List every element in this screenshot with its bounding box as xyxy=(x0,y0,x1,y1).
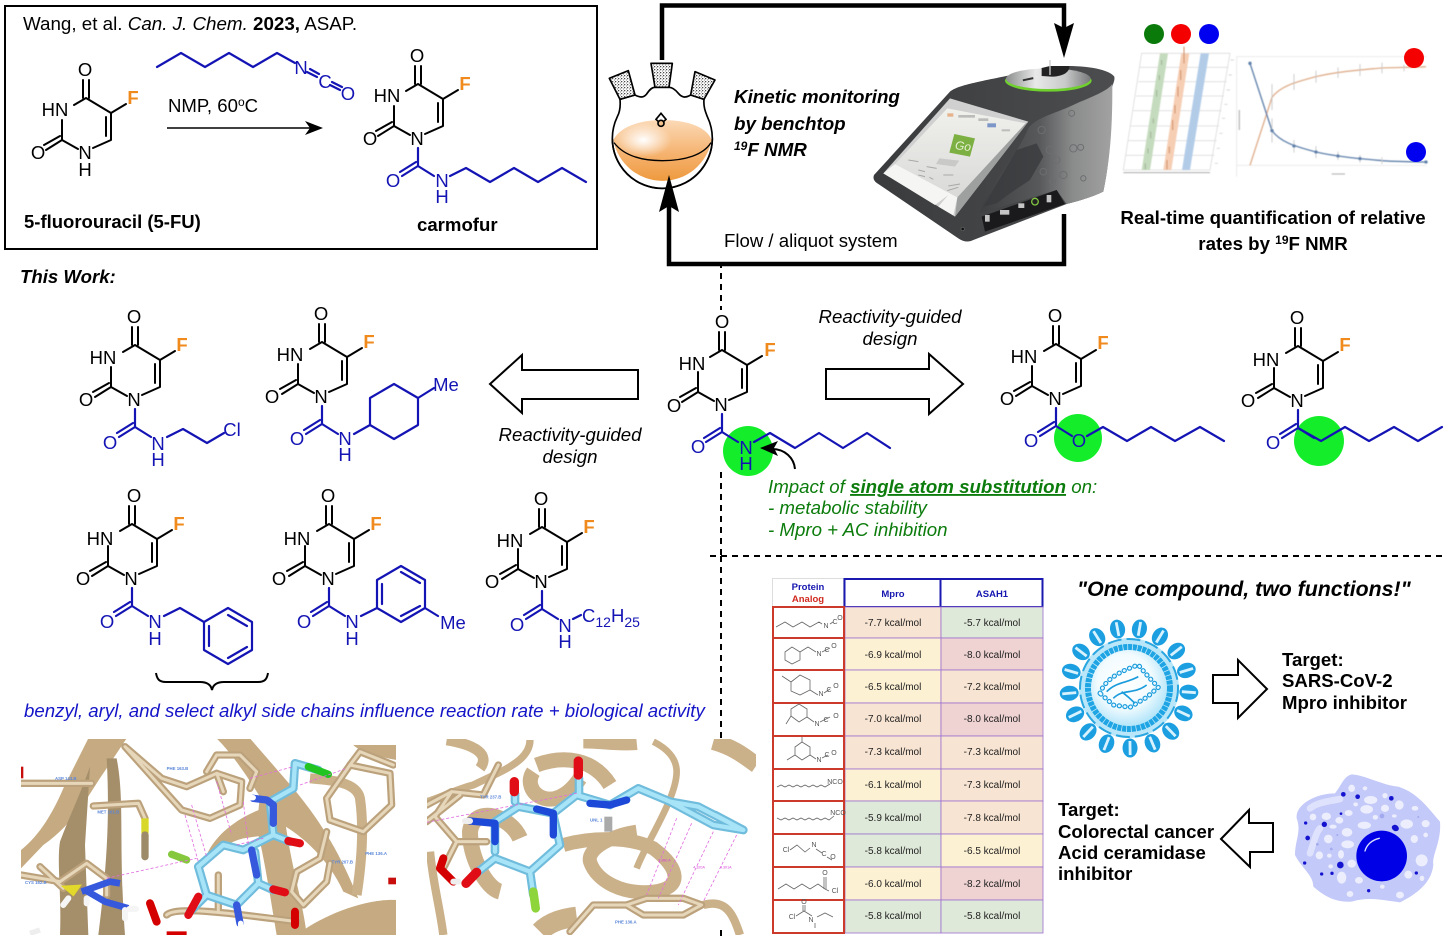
structure: carmofur: F xyxy=(459,73,471,94)
structure: carmofur parent: H xyxy=(739,453,753,474)
table analog structures: C xyxy=(824,752,830,759)
panel: concentration time-course chart xyxy=(1237,57,1428,177)
structure: hexyl isocyanate: O xyxy=(341,83,355,104)
table scores xyxy=(865,618,1020,922)
structure: carmofur parent: O xyxy=(715,311,729,332)
structure: carbamate analog xyxy=(1000,305,1224,451)
impact text: - metabolic stability xyxy=(768,497,929,518)
panel: docking image 1: MET 161.B xyxy=(97,810,119,815)
structure: carmofur parent: F xyxy=(764,339,776,360)
structure: amide analog: N xyxy=(1290,390,1304,411)
panel: literature synthesis box xyxy=(5,6,597,249)
structure: amide analog xyxy=(1241,307,1442,453)
green highlight: carmofur NH xyxy=(723,426,773,476)
structure: hexyl isocyanate: N xyxy=(294,57,308,78)
structure: m-tolyl analog: F xyxy=(370,513,382,534)
label: SARS-CoV-2 target: Target: xyxy=(1282,649,1344,670)
structure: dodecyl analog: H xyxy=(558,631,572,652)
structure: m-tolyl analog: O xyxy=(297,611,311,632)
structure: benzyl analog: O xyxy=(76,568,90,589)
structure: dodecyl analog: O xyxy=(485,571,499,592)
table analog structures: Cl xyxy=(783,847,790,854)
table analog structures: C xyxy=(823,717,829,724)
structure: methylcyclohexyl analog: Me xyxy=(433,374,459,395)
structure: carbamate analog: O xyxy=(1000,388,1014,409)
table analog structures: N xyxy=(816,757,822,764)
panel: docking image 2: PHE 136.A xyxy=(615,919,638,924)
table analog structures: N xyxy=(818,691,824,698)
table scores: -8.0 kcal/mol xyxy=(964,650,1020,661)
table scores: -6.5 kcal/mol xyxy=(964,846,1020,857)
structure: chloroethyl analog: N xyxy=(151,433,165,454)
structure: methylcyclohexyl analog xyxy=(265,303,459,465)
impact text: Impact of single atom substitution on: xyxy=(768,476,1097,497)
reaction arrow xyxy=(167,121,323,135)
table scores: -7.7 kcal/mol xyxy=(865,618,921,629)
structure: 5-fluorouracil: O xyxy=(31,142,45,163)
structure: amide analog: O xyxy=(1241,390,1255,411)
label: 5-FU: 5-fluorouracil (5-FU) xyxy=(24,211,201,232)
reaction conditions: NMP, 60 xyxy=(168,95,238,116)
caption: kinetic monitoring: by benchtop xyxy=(734,113,846,134)
arrow: cell to target xyxy=(1221,810,1273,867)
arrow: virus to target xyxy=(1213,660,1267,718)
structure: m-tolyl analog: Me xyxy=(440,612,466,633)
table scores: -6.1 kcal/mol xyxy=(865,780,921,791)
structure: carmofur: N xyxy=(435,170,449,191)
table scores: -8.0 kcal/mol xyxy=(964,714,1020,725)
structure: carmofur xyxy=(363,45,586,207)
table analog structures: N xyxy=(814,721,820,728)
table analog structures: O xyxy=(833,683,839,690)
structure: 5-fluorouracil: F xyxy=(127,87,139,108)
table analog structures: O xyxy=(837,615,843,622)
table scores: -7.3 kcal/mol xyxy=(964,747,1020,758)
label: colorectal cancer target: Target: xyxy=(1058,799,1120,820)
structure: carbamate analog: O xyxy=(1024,430,1038,451)
structure: carbamate analog: F xyxy=(1097,332,1109,353)
label: colorectal cancer target: inhibitor xyxy=(1058,863,1132,884)
structure: carmofur parent: HN xyxy=(679,353,705,374)
caption: right reactivity-guided design: Reactivity-guided xyxy=(819,306,962,327)
panel: docking image 1: PHE 136.A xyxy=(365,851,388,856)
structure: m-tolyl analog xyxy=(272,485,466,649)
caption: kinetic monitoring: 19 xyxy=(734,139,748,153)
icon: cancer cell xyxy=(1295,774,1440,902)
structure: amide analog: O xyxy=(1290,307,1304,328)
structure: dodecyl analog: 12 xyxy=(595,614,611,630)
table scores: -5.7 kcal/mol xyxy=(964,618,1020,629)
table analog structures: O xyxy=(830,854,836,861)
table analog structures: NCO xyxy=(827,779,843,786)
label: SARS-CoV-2 target: SARS-CoV-2 xyxy=(1282,670,1393,691)
table scores: -5.9 kcal/mol xyxy=(865,813,921,824)
arrow: right reactivity-guided xyxy=(826,354,963,414)
table header: ASAH1 xyxy=(976,589,1009,600)
structure: chloroethyl analog: HN xyxy=(90,347,116,368)
structure: chloroethyl analog xyxy=(79,306,241,470)
panel: docking image 2: UNL 1 xyxy=(590,818,603,823)
table header: Analog xyxy=(792,594,824,605)
structure: dodecyl analog: H xyxy=(611,605,624,626)
structure: methylcyclohexyl analog: H xyxy=(338,444,352,465)
structure: dodecyl analog: 25 xyxy=(624,614,640,630)
table header xyxy=(772,578,1042,607)
table cell fills and grid xyxy=(845,607,1043,933)
caption: real-time quantification: 19 xyxy=(1275,233,1289,247)
structure: m-tolyl analog: HN xyxy=(284,528,310,549)
structure: carbamate analog: HN xyxy=(1011,346,1037,367)
panel: docking image 2 xyxy=(427,740,757,935)
caption: real-time quantification: Real-time quantification of relative xyxy=(1120,207,1426,228)
table analog structures: C xyxy=(824,647,830,654)
structure: chloroethyl analog: N xyxy=(127,389,141,410)
structure: dodecyl analog xyxy=(485,488,640,652)
section divider lines xyxy=(710,262,1445,941)
structure: benzyl analog: H xyxy=(148,628,162,649)
structure: methylcyclohexyl analog: N xyxy=(338,428,352,449)
heading: this work: This Work: xyxy=(20,266,116,287)
reaction conditions: o xyxy=(238,95,245,109)
table analog structures xyxy=(776,615,846,928)
table header: Protein xyxy=(792,582,825,593)
label: carmofur: carmofur xyxy=(417,214,498,235)
table analog structures: NCO xyxy=(830,810,846,817)
structure: methylcyclohexyl analog: O xyxy=(290,428,304,449)
structure: dodecyl analog: N xyxy=(534,571,548,592)
structure: carmofur: N xyxy=(410,128,424,149)
table scores: -5.8 kcal/mol xyxy=(964,911,1020,922)
table header: Mpro xyxy=(881,589,905,600)
panel: docking image 1: CYS 162.B xyxy=(25,880,47,885)
structure: amide analog: O xyxy=(1266,432,1280,453)
structure: benzyl analog: O xyxy=(127,485,141,506)
panel: docking image 1: PHE 163.B xyxy=(167,766,188,771)
panel: docking image 1: ASP 143.B xyxy=(55,776,77,781)
caption: kinetic monitoring: Kinetic monitoring xyxy=(734,86,900,107)
impact text: - Mpro + AC inhibition xyxy=(768,519,948,540)
structure: methylcyclohexyl analog: HN xyxy=(277,344,303,365)
table analog structures: O xyxy=(833,713,839,720)
legend dots: species xyxy=(1144,24,1426,162)
brace xyxy=(156,673,268,690)
caption: real-time quantification: rates by xyxy=(1198,233,1348,254)
reaction conditions: C xyxy=(245,95,258,116)
flow loop lines xyxy=(659,6,1074,264)
panel: docking image 2: 4.320A xyxy=(693,865,705,869)
panel: docking image 1 xyxy=(21,738,398,935)
table analog structures: C xyxy=(832,619,838,626)
side chain note: benzyl, aryl, and select alkyl side chains influence reaction rate + biological activity xyxy=(24,700,706,721)
structure: benzyl analog: F xyxy=(173,513,185,534)
structure: chloroethyl analog: Cl xyxy=(223,419,241,440)
structure: chloroethyl analog: O xyxy=(127,306,141,327)
structure: carmofur parent xyxy=(667,311,890,474)
structure: benzyl analog: HN xyxy=(87,528,113,549)
structure: m-tolyl analog: O xyxy=(272,568,286,589)
structure: chloroethyl analog: F xyxy=(176,334,188,355)
icon: coronavirus xyxy=(1059,618,1199,758)
structure: hexyl isocyanate: C xyxy=(318,71,332,92)
icon: three-neck flask xyxy=(609,63,715,188)
table scores: -6.5 kcal/mol xyxy=(865,682,921,693)
structure: 5-fluorouracil: H xyxy=(78,159,92,180)
structure: carmofur parent: O xyxy=(691,436,705,457)
structure: methylcyclohexyl analog: F xyxy=(363,331,375,352)
table analog structures: C xyxy=(826,687,832,694)
structure: dodecyl analog: C xyxy=(582,605,595,626)
panel: docking image 2: TYR 237.B xyxy=(480,794,501,799)
structure: chloroethyl analog: H xyxy=(151,449,165,470)
label: SARS-CoV-2 target: Mpro inhibitor xyxy=(1282,692,1407,713)
table analog structures: C xyxy=(821,851,827,858)
caption: flow system: Flow / aliquot system xyxy=(724,230,898,251)
table analog structures: Cl xyxy=(832,888,839,895)
table scores: -7.2 kcal/mol xyxy=(964,682,1020,693)
arrow: left reactivity-guided xyxy=(490,355,638,413)
structure: carbamate analog: O xyxy=(1048,305,1062,326)
structure: dodecyl analog: F xyxy=(583,516,595,537)
structure: 5-fluorouracil: HN xyxy=(42,99,68,120)
table analog structures: N xyxy=(816,651,822,658)
structure: benzyl analog xyxy=(76,485,252,664)
structure: dodecyl analog: O xyxy=(510,614,524,635)
structure: m-tolyl analog: H xyxy=(345,628,359,649)
table analog structures: O xyxy=(801,899,807,906)
icon: benchtop NMR instrument: Go xyxy=(954,138,972,154)
curved arrow to NH xyxy=(760,441,795,469)
structure: m-tolyl analog: O xyxy=(321,485,335,506)
table analog structures: Cl xyxy=(789,914,796,921)
table analog structures: O xyxy=(822,870,828,877)
caption: kinetic monitoring: F NMR xyxy=(747,139,807,160)
structure: 5-fluorouracil xyxy=(31,59,139,180)
table scores: -7.3 kcal/mol xyxy=(865,747,921,758)
structure: benzyl analog: N xyxy=(124,568,138,589)
structure: carmofur parent: O xyxy=(667,395,681,416)
table analog structures: O xyxy=(831,643,837,650)
label: colorectal cancer target: Colorectal cancer xyxy=(1058,821,1214,842)
table scores: -7.0 kcal/mol xyxy=(865,714,921,725)
structure: dodecyl analog: O xyxy=(534,488,548,509)
panel: docking image 2: 4.301A xyxy=(720,865,732,869)
structure: carmofur: O xyxy=(410,45,424,66)
green highlight: amide CH2 xyxy=(1294,416,1344,466)
table scores: -5.8 kcal/mol xyxy=(865,846,921,857)
structure: methylcyclohexyl analog: O xyxy=(265,386,279,407)
structure: benzyl analog: O xyxy=(100,611,114,632)
table analog structures: N xyxy=(823,623,829,630)
panel: docking image 1: TYR 207.B xyxy=(332,859,353,864)
structure: amide analog: F xyxy=(1339,334,1351,355)
structure: dodecyl analog: N xyxy=(558,615,572,636)
heading: one compound two functions: "One compound, two functions!" xyxy=(1077,577,1412,601)
structure: carmofur: H xyxy=(435,186,449,207)
caption: real-time quantification: F NMR xyxy=(1289,233,1348,254)
table analog cells xyxy=(773,607,844,933)
structure: chloroethyl analog: O xyxy=(103,432,117,453)
structure: 5-fluorouracil: O xyxy=(78,59,92,80)
table: docking scores xyxy=(772,578,1043,933)
structure: m-tolyl analog: N xyxy=(321,568,335,589)
table analog structures: O xyxy=(831,750,837,757)
icon: benchtop NMR instrument xyxy=(874,60,1114,242)
structure: benzyl analog: N xyxy=(148,611,162,632)
table scores: -7.3 kcal/mol xyxy=(964,780,1020,791)
structure: carmofur parent: N xyxy=(739,437,753,458)
structure: carmofur: O xyxy=(386,170,400,191)
structure: carbamate analog: O xyxy=(1072,430,1086,451)
table scores: -6.0 kcal/mol xyxy=(865,879,921,890)
table scores: -6.9 kcal/mol xyxy=(865,650,921,661)
table analog structures: N xyxy=(811,842,817,849)
panel: docking image 2: 3.980 A xyxy=(658,859,671,863)
table scores: -8.2 kcal/mol xyxy=(964,879,1020,890)
table scores: -7.8 kcal/mol xyxy=(964,813,1020,824)
structure: m-tolyl analog: N xyxy=(345,611,359,632)
structure: amide analog: HN xyxy=(1253,349,1279,370)
structure: 5-fluorouracil: N xyxy=(78,142,92,163)
structure: carmofur: HN xyxy=(374,85,400,106)
label: colorectal cancer target: Acid ceramidase xyxy=(1058,842,1206,863)
structure: carmofur parent: N xyxy=(714,394,728,415)
structure: dodecyl analog: HN xyxy=(497,530,523,551)
structure: methylcyclohexyl analog: O xyxy=(314,303,328,324)
green highlight: carbamate O xyxy=(1054,414,1102,462)
panel: stacked spectra chart xyxy=(1123,47,1234,173)
structure: carbamate analog: N xyxy=(1048,388,1062,409)
caption: right reactivity-guided design: design xyxy=(863,328,917,349)
caption: left reactivity-guided design: Reactivity-guided xyxy=(499,424,642,445)
table analog structures: N xyxy=(808,917,814,924)
structure: methylcyclohexyl analog: N xyxy=(314,386,328,407)
structure: chloroethyl analog: O xyxy=(79,389,93,410)
table scores: -5.8 kcal/mol xyxy=(865,911,921,922)
citation: Wang, et al. Can. J. Chem. 2023, ASAP. xyxy=(23,13,357,34)
structure: carmofur: O xyxy=(363,128,377,149)
structure: hexyl isocyanate xyxy=(157,53,355,104)
caption: left reactivity-guided design: design xyxy=(543,446,597,467)
